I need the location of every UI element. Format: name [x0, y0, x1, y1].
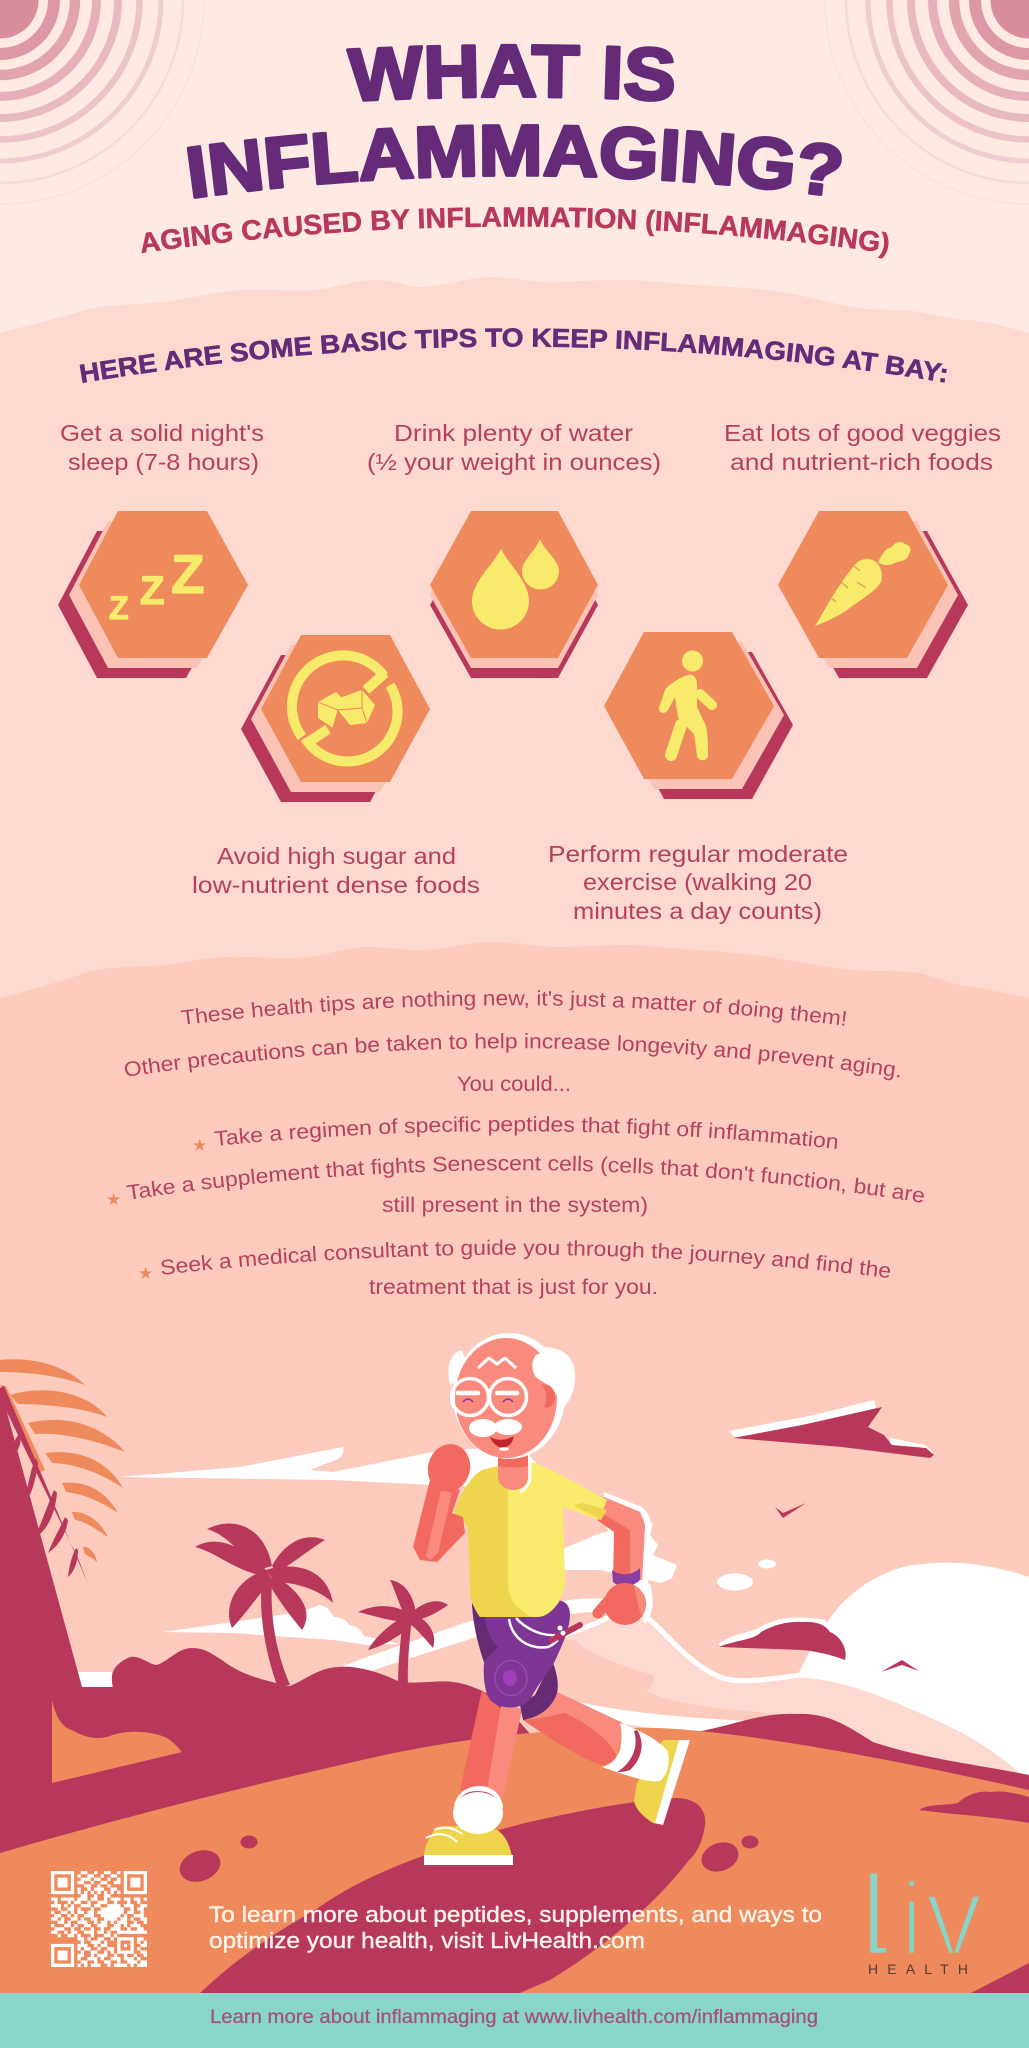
scene: ground dots and bush — [175, 1791, 1029, 1993]
man: hair and outline — [448, 1333, 575, 1459]
icon: zzz: Z — [140, 569, 164, 613]
decoration: top-left concentric rings — [0, 0, 204, 204]
hexagon icon: sleep — [58, 511, 248, 678]
advice paragraph: These health tips are nothing new, it's just a matter of doing them! — [180, 990, 846, 1026]
call to action text — [209, 1902, 822, 1953]
man: ear — [541, 1384, 555, 1408]
bullet: consultant: Seek a medical consultant to guide you through the journey and find the — [162, 1240, 890, 1278]
scene: cream wave — [540, 1614, 1029, 1800]
scene: large palm tree — [195, 1524, 333, 1685]
man: shorts back — [520, 1660, 558, 1720]
tip text: avoid sugar — [192, 843, 480, 898]
footer text: Learn more about inflammaging at www.livhealth.com/inflammaging — [210, 2007, 818, 2028]
bullet: peptides: ★ — [192, 1136, 207, 1155]
scene: dark ground and mountain — [0, 1387, 540, 1870]
tip text: sleep — [60, 420, 264, 475]
title line 2: INFLAMMAGING? — [186, 124, 842, 199]
tip text: sleep: sleep (7-8 hours) — [68, 449, 259, 475]
man: face — [452, 1358, 526, 1451]
scene: dark right hill — [690, 1714, 1029, 1800]
bullet: consultant — [138, 1240, 890, 1299]
icon: zzz — [109, 543, 205, 626]
call to action text: To learn more about peptides, supplements, and ways to — [209, 1902, 822, 1927]
advice paragraph — [124, 990, 900, 1096]
subtitle: AGING CAUSED BY INFLAMMATION (INFLAMMAGING) — [141, 207, 888, 258]
hexagon icon: water — [430, 511, 598, 678]
man: head — [455, 1338, 557, 1458]
scene: orange wedge on left — [52, 1700, 182, 1783]
man: hair side — [532, 1352, 574, 1395]
bullet: peptides: Take a regimen of specific peptides that fight off inflammation — [214, 1116, 838, 1149]
background: advice section wave — [0, 942, 1029, 2048]
scene: orange foreground hill — [0, 1728, 1029, 1993]
tip text: exercise: minutes a day counts) — [573, 898, 822, 924]
man: back shoe — [634, 1740, 690, 1825]
logo: Liv Health: v — [925, 1853, 983, 1980]
tip text: water: Drink plenty of water — [394, 420, 633, 446]
man: shirt — [454, 1462, 607, 1617]
hexagon icon: avoid sugar — [241, 635, 430, 802]
logo: Liv Health: i — [900, 1861, 923, 1978]
man: front leg — [460, 1690, 522, 1797]
advice paragraph: You could... — [457, 1073, 571, 1096]
title line 1: WHAT IS — [346, 44, 674, 102]
hexagon icon: carrot — [778, 511, 968, 678]
scene: big palm fronds — [0, 1359, 125, 1584]
tip text: veggies: and nutrient-rich foods — [730, 449, 993, 475]
title — [186, 44, 842, 199]
tip text: exercise — [548, 841, 848, 924]
scene: white clouds — [120, 1445, 776, 1690]
footer band — [0, 1993, 1029, 2048]
logo: Liv Health: L — [858, 1845, 926, 1981]
tip text: water — [367, 420, 661, 475]
logo: Liv Health — [869, 1874, 980, 1974]
man: wristband — [612, 1568, 640, 1586]
man: viewer-right arm — [597, 1492, 651, 1622]
tip text: veggies — [724, 420, 1001, 475]
scene: dark cloud by hill — [718, 1618, 846, 1660]
man: shorts — [472, 1600, 580, 1708]
bullet: consultant: treatment that is just for you. — [369, 1276, 658, 1299]
background: tips section wave — [0, 277, 1029, 1000]
man: front shoe — [424, 1826, 513, 1865]
scene: birds — [775, 1503, 919, 1672]
tip text: sleep: Get a solid night's — [60, 420, 264, 446]
icon: walking person — [659, 650, 712, 760]
icon: no sugar — [292, 655, 398, 762]
tip text: exercise: Perform regular moderate — [548, 841, 848, 867]
scene: small palm tree — [358, 1580, 448, 1685]
man: back leg — [523, 1690, 623, 1765]
hexagon icon: walking — [604, 632, 793, 799]
advice paragraph: Other precautions can be taken to help increase longevity and prevent aging. — [124, 1033, 900, 1080]
man: back sock — [602, 1723, 669, 1781]
tip text: veggies: Eat lots of good veggies — [724, 420, 1001, 446]
tip text: avoid sugar: low-nutrient dense foods — [192, 872, 480, 898]
bullet: consultant: ★ — [138, 1264, 153, 1283]
tip text: avoid sugar: Avoid high sugar and — [217, 843, 456, 869]
scene: big white hill — [790, 1563, 1029, 1790]
call to action text: optimize your health, visit LivHealth.com — [209, 1928, 645, 1953]
tip text: exercise: exercise (walking 20 — [583, 869, 812, 895]
scene: dark road — [200, 1798, 705, 1993]
tip text: water: (½ your weight in ounces) — [367, 449, 661, 475]
scene: dark cloud upper right — [729, 1400, 934, 1458]
bullet: supplement: ★ — [106, 1190, 121, 1209]
bullet: supplement: Take a supplement that fights Senescent cells (cells that don't function, but are — [126, 1156, 924, 1202]
logo: Liv Health: HEALTH — [868, 1961, 968, 1977]
icon: zzz: Z — [109, 590, 129, 626]
illustration: running old man — [413, 1333, 690, 1865]
man: neck — [498, 1455, 530, 1492]
icon: water drops — [472, 539, 559, 630]
man: viewer-left arm — [413, 1439, 475, 1562]
QR code — [51, 1871, 147, 1967]
decoration: top-right concentric rings — [825, 0, 1029, 204]
icon: carrot — [815, 542, 910, 626]
icon: zzz: Z — [171, 543, 205, 605]
man: front sock — [453, 1786, 503, 1834]
man: hand — [598, 1583, 651, 1625]
bullet: supplement: still present in the system) — [382, 1194, 648, 1217]
section heading: HERE ARE SOME BASIC TIPS TO KEEP INFLAMMAGING AT BAY: — [80, 328, 947, 383]
